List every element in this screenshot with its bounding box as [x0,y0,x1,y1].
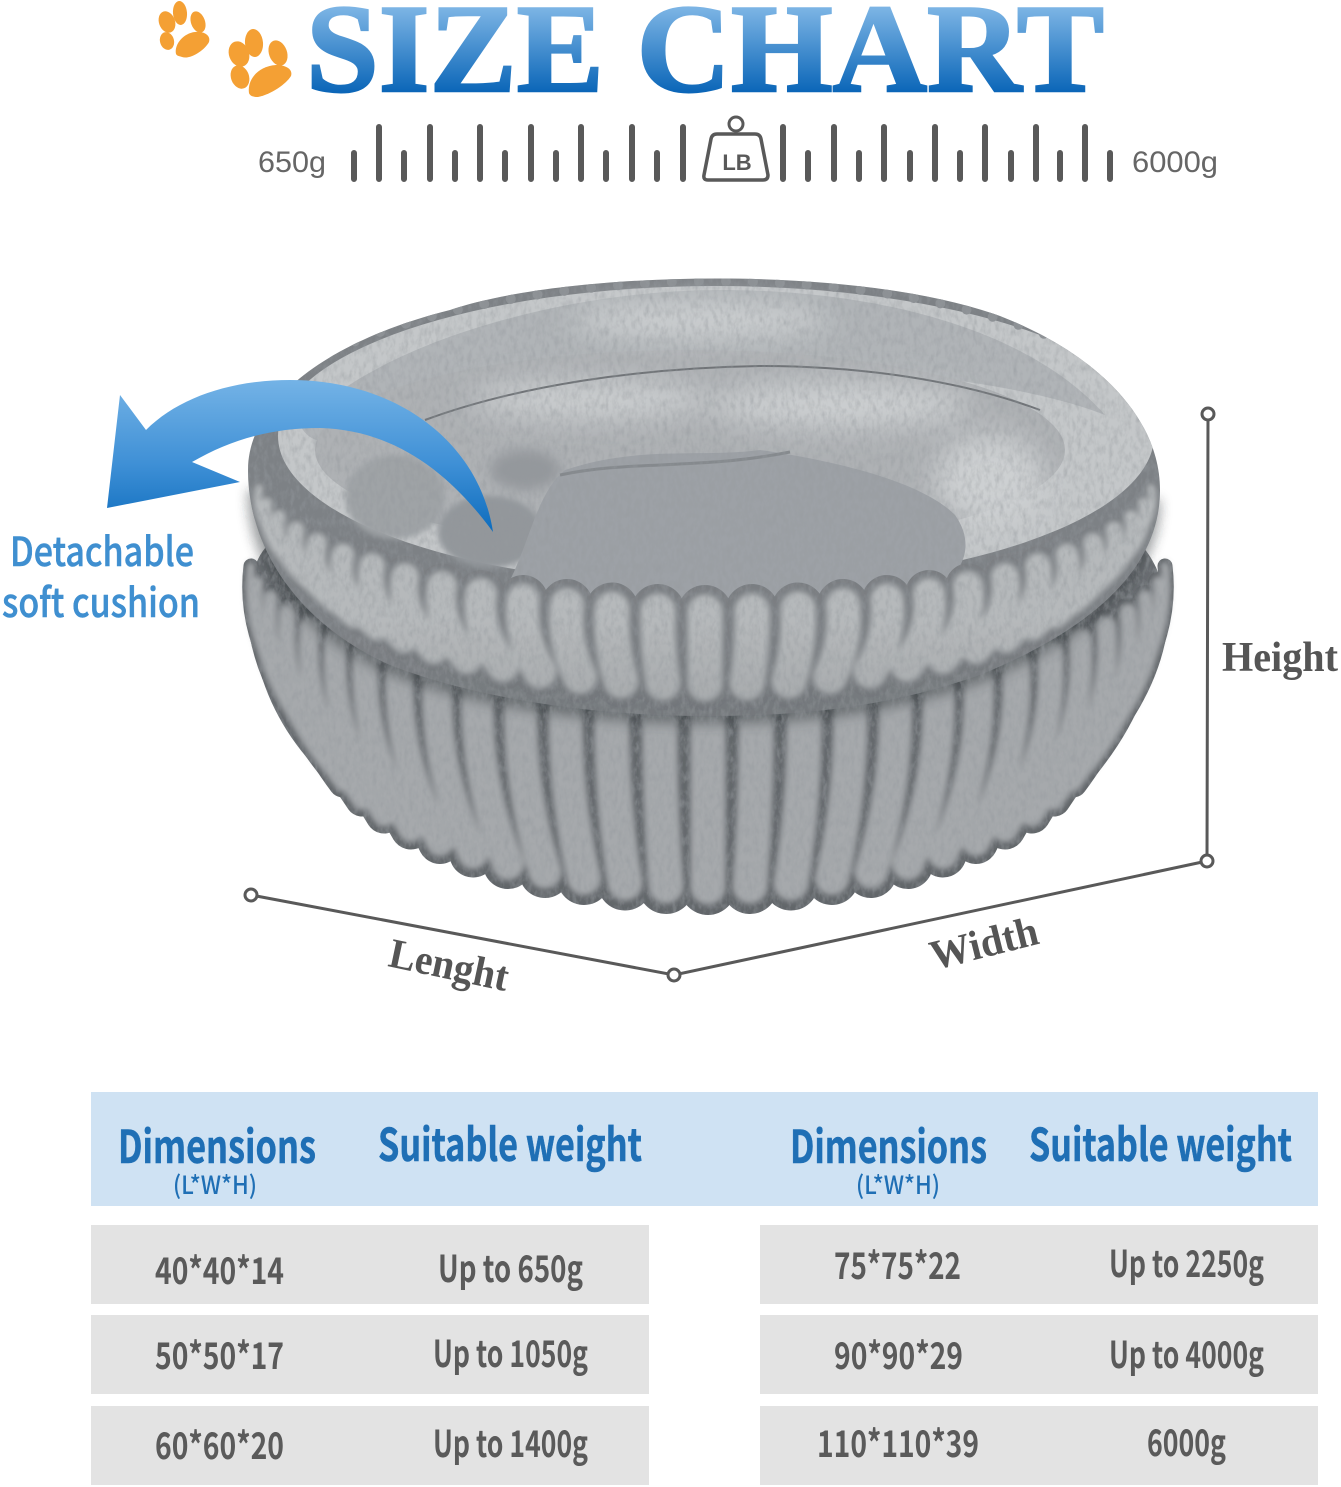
label: 6000g: 6000g [1132,146,1218,179]
label: Lenght: Lenght [385,931,513,1001]
row 3 left: 60*60*20 [155,1416,284,1470]
lower ring base [250,520,1165,900]
label: Height: Height [1222,635,1338,681]
callout: detachable soft cushion: soft cushion [2,571,200,629]
label: Width: Width [925,908,1043,980]
row 3 left: Up to 1400g [433,1414,588,1468]
inner wall [315,365,1065,524]
dimension lines [245,408,1214,981]
row 1 left [91,1225,649,1304]
wall highlights [470,302,1045,525]
header: dimensions left: Dimensions [118,1111,316,1176]
upper ribs dark [252,508,960,606]
row 3 right: 110*110*39 [817,1414,979,1468]
rib lower shading [458,660,952,716]
row 3 right: 6000g [1147,1413,1226,1467]
row 1 right: 75*75*22 [834,1236,961,1290]
header: unit left: (L*W*H) [173,1166,257,1202]
shadow under upper ring [248,490,1160,724]
wall shadow [490,450,560,490]
lower ribs light [250,566,1166,887]
row 2 right: 90*90*29 [834,1326,963,1380]
callout: detachable soft cushion [2,520,200,629]
weight scale [258,117,1218,180]
pet bed photo [240,270,1170,900]
row 3 right [760,1406,1318,1485]
callout: detachable soft cushion: Detachable [10,520,194,578]
seam [425,366,1040,420]
row 2 left: 50*50*17 [155,1326,284,1380]
cushion hole [345,455,445,539]
header: suitable weight left: Suitable weight [378,1109,642,1174]
icon: LB weight [704,117,768,180]
back wall [300,290,1105,441]
row 1 right: Up to 2250g [1109,1234,1264,1288]
upper ribs light [258,488,1152,684]
row 3 left [91,1406,649,1485]
blue arrow [107,380,493,532]
icon: small paw [156,0,209,58]
row 1 right [760,1225,1318,1304]
pillow fold [560,452,790,475]
header: dimensions right: Dimensions [790,1111,987,1176]
icon: LB weight: LB [722,150,752,175]
upper ring [240,270,1170,720]
pillow [505,450,966,607]
row 2 left [91,1315,649,1394]
row 1 left: Up to 650g [438,1239,583,1293]
scalloped back rim [330,281,1060,352]
light inner rim [278,286,1154,586]
row 2 right [760,1315,1318,1394]
row 2 left: Up to 1050g [433,1324,588,1378]
row 2 right: Up to 4000g [1109,1325,1264,1379]
scale ticks [354,127,1110,179]
cushion bump [438,496,542,568]
header: unit right: (L*W*H) [856,1166,940,1202]
row 1 left: 40*40*14 [155,1241,284,1295]
icon: large paw [225,28,291,97]
table header band [91,1092,1318,1206]
lower ribs dark [250,566,1166,887]
label: 650g: 650g [258,146,326,179]
